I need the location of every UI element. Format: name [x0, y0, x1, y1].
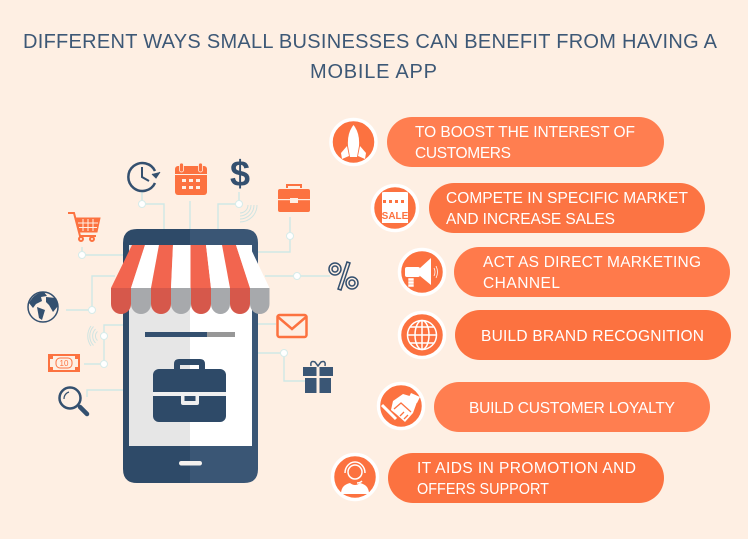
panel: direct marketing: CHANNEL [483, 275, 560, 292]
icon: envelope [278, 315, 306, 337]
icon: wire globe [400, 312, 444, 358]
panel: compete: COMPETE IN SPECIFIC MARKET [446, 190, 689, 207]
panel: boost interest: CUSTOMERS [415, 145, 511, 162]
phone body [123, 229, 258, 483]
progress bar [145, 332, 235, 337]
panel: direct marketing: ACT AS DIRECT MARKETING [483, 254, 701, 271]
icon: handshake [378, 384, 424, 428]
panel: brand recognition [400, 310, 731, 360]
icon: banknote [48, 354, 80, 372]
panel: boost interest: TO BOOST THE INTEREST OF [415, 124, 635, 141]
icon: gift box [303, 362, 333, 393]
panel: compete [372, 183, 705, 233]
icon: sale shop: SALE [382, 211, 409, 222]
icon: banknote: 10 [60, 359, 69, 368]
panel: boost interest [331, 117, 664, 167]
icon: rocket [331, 120, 376, 164]
icon: megaphone [400, 250, 444, 294]
title: MOBILE APP [310, 61, 437, 83]
title: DIFFERENT WAYS SMALL BUSINESSES CAN BENEFIT FROM HAVING A [23, 31, 718, 53]
icon: shopping cart [68, 213, 100, 241]
panel: brand recognition: BUILD BRAND RECOGNITION [481, 328, 704, 345]
icon: clock [128, 163, 160, 191]
icon: dollar sign: $ [230, 153, 250, 194]
icon: magnifier [60, 388, 87, 414]
panel: customer loyalty: BUILD CUSTOMER LOYALTY [469, 400, 675, 417]
awning [111, 245, 270, 314]
phone illustration [111, 229, 270, 483]
icon: calendar [175, 163, 207, 195]
title [23, 31, 718, 83]
panel: compete: AND INCREASE SALES [446, 211, 615, 228]
panel: direct marketing [400, 247, 730, 297]
connector lines [66, 192, 330, 397]
icon: headset agent [332, 454, 378, 500]
briefcase [153, 359, 226, 422]
panel: promotion and support: IT AIDS IN PROMOTION AND [417, 460, 636, 477]
icon: globe [28, 292, 58, 322]
icon: sale shop [372, 186, 418, 230]
panel: promotion and support: OFFERS SUPPORT [417, 481, 549, 498]
icon: orange briefcase [278, 185, 310, 212]
panel: promotion and support [332, 453, 664, 503]
panel: customer loyalty [378, 382, 710, 432]
icon: percent sign [329, 262, 358, 290]
